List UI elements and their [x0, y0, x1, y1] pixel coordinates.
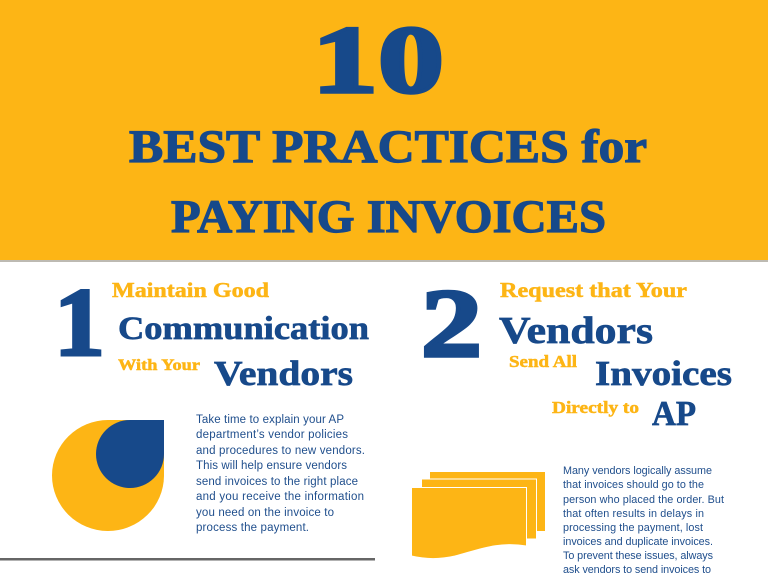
number 2: 2	[421, 270, 482, 378]
heading: practice 2: Vendors	[499, 310, 653, 352]
panel: practice 2	[412, 270, 732, 576]
icon: stacked documents	[412, 472, 545, 559]
text block: practice 1 body: This will help ensure vendors	[196, 460, 347, 472]
text block: practice 1 body	[196, 414, 365, 534]
text block: practice 2 body: invoices and duplicate invoices.	[563, 536, 713, 548]
text block: practice 1 body: Take time to explain your AP	[196, 414, 344, 426]
heading: practice 1	[112, 278, 369, 393]
text block: practice 2 body: Many vendors logically assume	[563, 465, 712, 477]
text block: practice 2 body: ask vendors to send invoices to	[563, 564, 711, 576]
text block: practice 1 body: and procedures to new vendors.	[196, 445, 365, 457]
text block: practice 1 body: you need on the invoice to	[196, 507, 334, 519]
heading: practice 2: Invoices	[595, 354, 732, 393]
title: PAYING INVOICES	[171, 191, 606, 243]
heading: practice 2: Directly to	[552, 398, 639, 417]
title: 10	[312, 6, 444, 113]
text block: practice 1 body: send invoices to the right place	[196, 476, 358, 488]
panel: practice 1	[52, 269, 369, 534]
text block: practice 1 body: department’s vendor policies	[196, 429, 348, 441]
title: BEST PRACTICES for	[129, 121, 647, 173]
text block: practice 1 body: process the payment.	[196, 522, 309, 534]
heading: practice 1: Vendors	[214, 354, 353, 393]
text block: practice 2 body	[563, 465, 724, 576]
icon: droplet	[52, 420, 164, 531]
heading: practice 1: Communication	[118, 311, 369, 347]
text block: practice 2 body: person who placed the order. But	[563, 494, 724, 506]
divider line	[0, 558, 375, 560]
heading: practice 1: Maintain Good	[112, 278, 269, 302]
heading: practice 2: Send All	[509, 352, 577, 371]
text block: practice 1 body: and you receive the information	[196, 491, 364, 503]
heading: practice 2: Request that Your	[500, 278, 687, 302]
text block: practice 2 body: To prevent these issues, always	[563, 550, 714, 562]
text block: practice 2 body: processing the payment, lost	[563, 522, 703, 534]
heading: practice 2	[499, 278, 732, 433]
text block: practice 2 body: that often results in delays in	[563, 508, 704, 520]
heading: practice 2: AP	[652, 394, 696, 433]
title	[129, 6, 647, 243]
heading: practice 1: With Your	[118, 357, 200, 374]
header banner	[0, 0, 768, 262]
number 1: 1	[54, 269, 105, 377]
text block: practice 2 body: that invoices should go to the	[563, 479, 704, 491]
